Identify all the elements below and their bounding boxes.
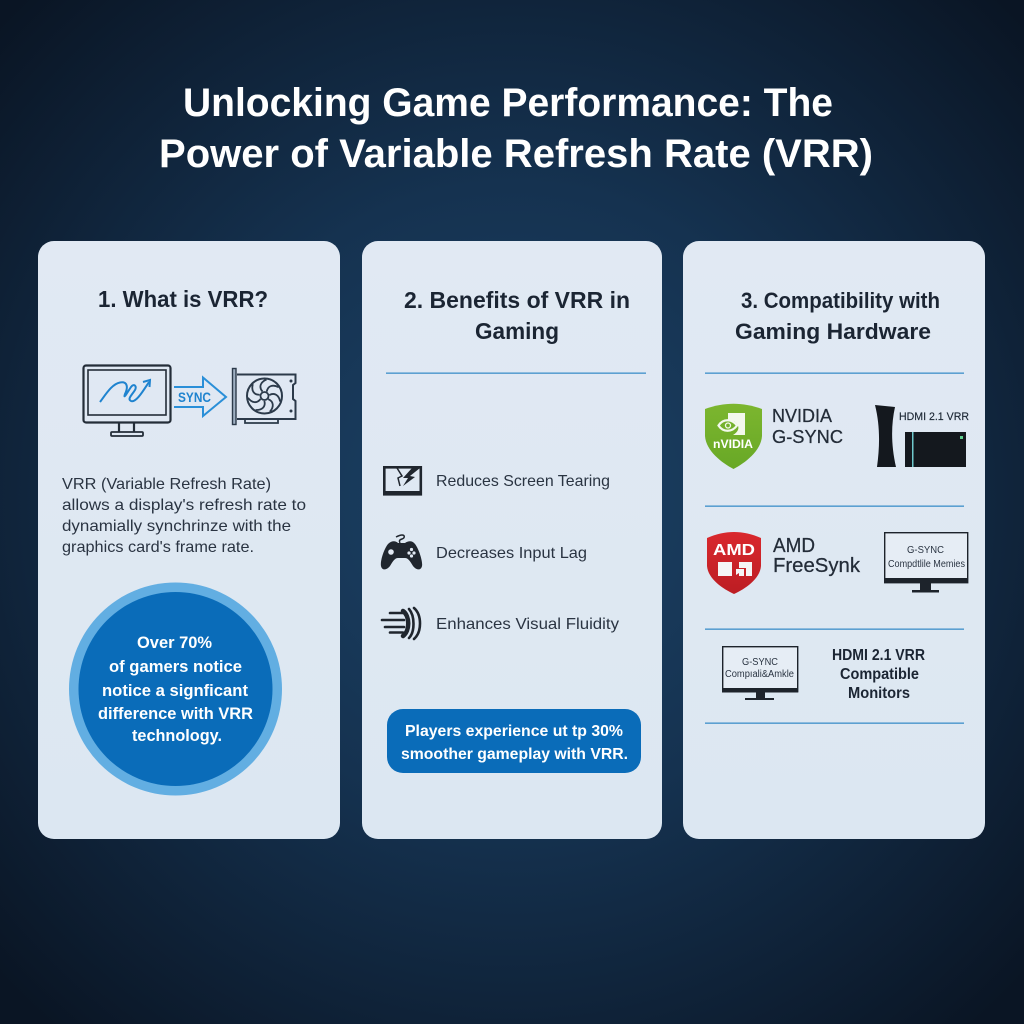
icon: AMD shield: AMD [713, 542, 755, 559]
callout: smoother gameplay: Players experience ut tp 30% [405, 723, 623, 740]
icon: NVIDIA shield: nVIDIA [713, 439, 753, 451]
heading: benefits of VRR [404, 287, 630, 344]
text: AMD FreeSynk: FreeSynk [773, 555, 861, 577]
icon: screen tearing [384, 467, 421, 495]
text: VRR definition: graphics card's frame rate. [62, 539, 254, 556]
callout: 70 percent stat circle [69, 582, 282, 796]
icon: G-SYNC compatible monitor: Compdtlile Memies [888, 559, 965, 570]
text: NVIDIA G-SYNC: G-SYNC [772, 426, 843, 447]
icon: sync arrow [174, 378, 226, 416]
callout: smoother gameplay: smoother gameplay with VRR. [401, 746, 628, 763]
text: VRR definition: allows a display's refresh rate to [62, 497, 306, 514]
heading: benefits of VRR: 2. Benefits of VRR in [404, 287, 630, 313]
heading: what is VRR: 1. What is VRR? [98, 286, 268, 312]
text: HDMI compatible monitors [832, 647, 925, 702]
panel: compatibility with gaming hardware [683, 241, 985, 839]
title: Power of Variable Refresh Rate (VRR) [159, 132, 873, 176]
text: VRR definition [62, 476, 306, 556]
text: AMD FreeSynk [773, 535, 861, 577]
icon: sync arrow: SYNC [178, 390, 211, 405]
text: enhances visual fluidity: Enhances Visual Fluidity [436, 616, 619, 633]
text: AMD FreeSynk: AMD [773, 535, 815, 557]
callout: 70 percent stat circle: notice a signficant [102, 682, 249, 700]
callout: 70 percent stat circle: of gamers notice [109, 658, 242, 676]
text: decreases input lag: Decreases Input Lag [436, 545, 587, 562]
text: HDMI compatible monitors: HDMI 2.1 VRR [832, 647, 925, 664]
icon: console box [905, 432, 966, 467]
text: NVIDIA G-SYNC: NVIDIA [772, 405, 833, 426]
icon: second compatible monitor: G-SYNC [742, 657, 778, 668]
heading: compatibility: Gaming Hardware [735, 319, 931, 344]
text: VRR definition: VRR (Variable Refresh Rate) [62, 476, 271, 493]
title: Unlocking Game Performance: The [183, 81, 833, 125]
icon: second compatible monitor: Compıali&Amkle [725, 669, 794, 680]
icon: monitor with refresh curve [84, 366, 170, 436]
text: HDMI compatible monitors: Monitors [848, 685, 910, 702]
icon: NVIDIA shield [705, 404, 762, 469]
icon: AMD shield [707, 532, 761, 594]
heading: compatibility: 3. Compatibility with [741, 288, 940, 313]
icon: G-SYNC compatible monitor: G-SYNC [907, 545, 944, 556]
text: reduces screen tearing: Reduces Screen Tearing [436, 473, 610, 490]
text: VRR definition: dynamially synchrinze with the [62, 518, 291, 535]
heading: compatibility [735, 288, 940, 344]
title [159, 81, 873, 176]
icon: motion fluidity [382, 608, 420, 639]
text: NVIDIA G-SYNC [772, 405, 843, 447]
text: HDMI compatible monitors: Compatible [840, 666, 919, 683]
callout: 70 percent stat circle: difference with VRR [98, 705, 253, 723]
callout: 70 percent stat circle: technology. [132, 727, 222, 745]
label: HDMI 2.1 VRR: HDMI 2.1 VRR [899, 411, 969, 423]
icon: game controller [381, 535, 422, 569]
icon: G-SYNC compatible monitor [884, 533, 968, 592]
icon: second compatible monitor [722, 647, 798, 700]
callout: smoother gameplay [387, 709, 641, 773]
panel: what is VRR [38, 241, 340, 839]
heading: benefits of VRR: Gaming [475, 318, 559, 344]
icon: console tower [875, 405, 896, 467]
callout: 70 percent stat circle: Over 70% [137, 634, 212, 652]
icon: graphics card [232, 368, 296, 424]
panel: benefits of VRR [362, 241, 662, 839]
